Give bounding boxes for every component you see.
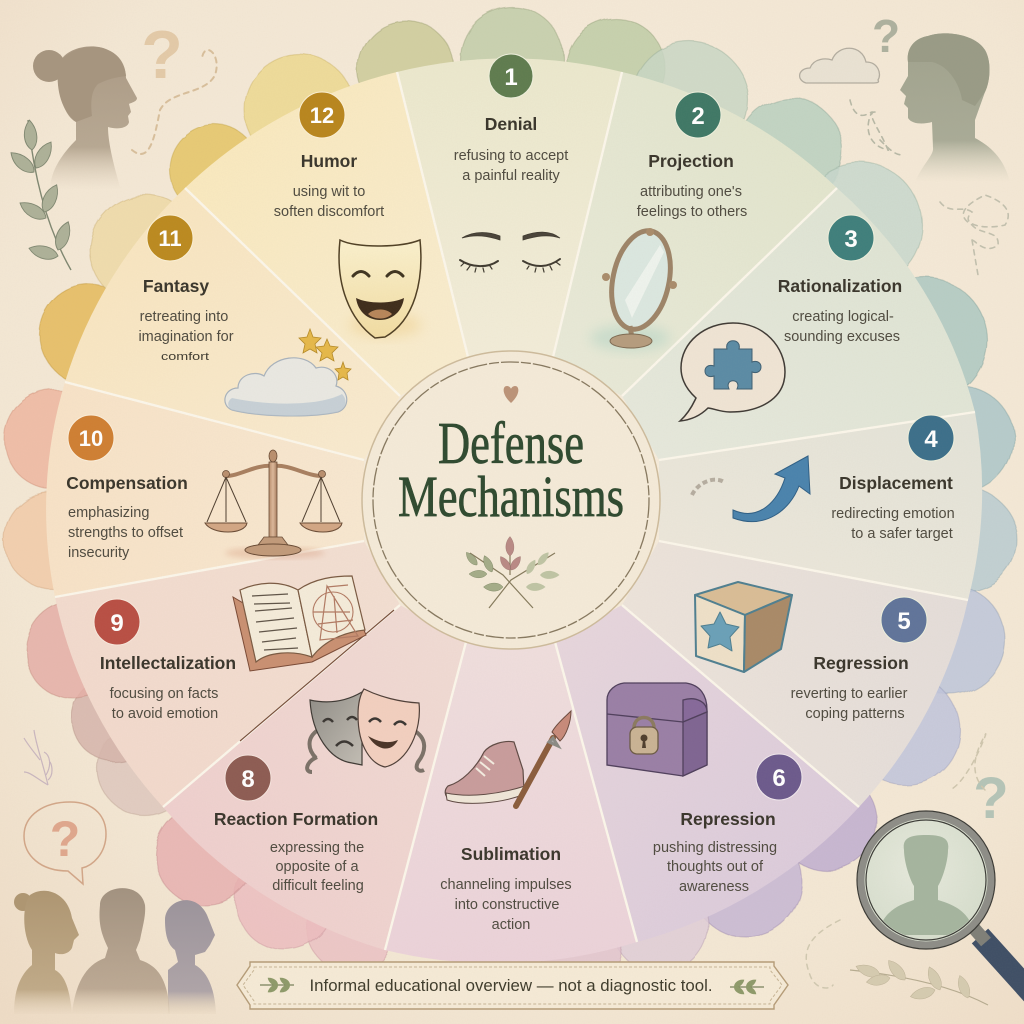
panel: wedge 10 Compensation: strengths to offset <box>68 525 183 541</box>
panel: wedge 12 Humor: using wit to <box>293 184 365 200</box>
icon: speech bubble with puzzle piece <box>680 323 785 421</box>
icon: right laurel <box>730 977 764 996</box>
icon: leaf sprig <box>464 536 560 608</box>
panel: wedge 6 Repression: awareness <box>679 879 749 895</box>
panel: wedge 2 Projection: feelings to others <box>637 204 747 220</box>
panel: wedge 9 Intellectualization: focusing on facts <box>110 686 218 702</box>
icon: faint sprig left <box>24 730 52 785</box>
panel: wedge 1 Denial: refusing to accept <box>454 148 568 164</box>
icon: comedy and tragedy masks <box>307 689 424 772</box>
icon: dreamy cloud with stars <box>225 329 351 416</box>
panel: wedge 2 Projection: 2 <box>691 103 705 130</box>
panel: wedge 10 Compensation: emphasizing <box>68 505 149 521</box>
panel: wedge 4 Displacement <box>692 415 955 542</box>
panel: wedge 6 Repression: Repression <box>680 809 776 829</box>
panel: wedge 5 Regression: coping patterns <box>805 706 905 722</box>
panel: wedge 7 Sublimation: action <box>492 917 530 933</box>
panel: wedge 6 Repression: pushing distressing <box>653 840 777 856</box>
panel: wedge 11 Fantasy: comfort <box>161 351 209 363</box>
panel: wedge 7 Sublimation: channeling impulses <box>440 877 572 893</box>
panel: wedge 8 Reaction Formation: Reaction Formation <box>214 809 378 829</box>
panel: wedge 4 Displacement: Displacement <box>839 473 953 493</box>
panel: wedge 4 Displacement: to a safer target <box>851 526 953 542</box>
panel: wedge 1 Denial: Denial <box>485 114 537 134</box>
panel: wedge 4 Displacement: redirecting emotion <box>831 506 955 522</box>
icon: balance scale <box>205 450 342 559</box>
icon: left laurel <box>260 976 294 995</box>
icon: closed eyes <box>460 232 560 272</box>
panel: wedge 5 Regression <box>695 582 927 722</box>
icon: heart <box>504 386 518 403</box>
title <box>398 410 624 529</box>
footer banner: Informal educational overview — not a diagnostic tool. <box>310 977 712 995</box>
panel: wedge 4 Displacement: 4 <box>924 426 938 453</box>
panel: wedge 8 Reaction Formation <box>214 689 424 894</box>
decorative silhouettes: group bottom left <box>14 888 216 1014</box>
panel: wedge 5 Regression: Regression <box>813 653 909 673</box>
panel: wedge 8 Reaction Formation: opposite of a <box>275 859 359 875</box>
panel: wedge 3 Rationalization: sounding excuses <box>784 329 900 345</box>
panel: wedge 12 Humor: soften discomfort <box>274 204 384 220</box>
icon: cloud top right <box>800 48 880 83</box>
panel: wedge 10 Compensation: 10 <box>79 426 103 451</box>
panel: wedge 8 Reaction Formation: 8 <box>241 766 255 793</box>
icon: question mark bottom right: ? <box>973 766 1009 831</box>
title: Defense <box>438 410 584 476</box>
icon: oval mirror <box>590 225 679 351</box>
decorative silhouette: man top right <box>900 33 1010 182</box>
icon: smiling mask <box>339 240 421 338</box>
panel: wedge 2 Projection: attributing one's <box>640 184 742 200</box>
panel: wedge 3 Rationalization <box>680 215 902 421</box>
panel: wedge 11 Fantasy: Fantasy <box>143 276 209 296</box>
panel: wedge 7 Sublimation: Sublimation <box>461 844 561 864</box>
panel: wedge 10 Compensation: Compensation <box>66 473 188 493</box>
icon: leaf branch bottom right <box>850 957 988 1005</box>
panel: wedge 1 Denial: a painful reality <box>462 168 561 184</box>
icon: question mark top right: ? <box>872 10 900 62</box>
panel: wedge 8 Reaction Formation: difficult feeling <box>272 878 364 894</box>
panel: wedge 11 Fantasy: retreating into <box>140 309 228 325</box>
panel: wedge 11 Fantasy: 11 <box>158 226 182 251</box>
icon: curved blue arrow <box>692 456 810 522</box>
panel: wedge 1 Denial: 1 <box>504 64 518 91</box>
panel: wedge 3 Rationalization: Rationalization <box>778 276 902 296</box>
panel: wedge 10 Compensation: insecurity <box>68 545 130 561</box>
panel: wedge 9 Intellectualization: to avoid emotion <box>112 706 218 722</box>
panel: wedge 11 Fantasy: imagination for <box>138 329 234 345</box>
panel: wedge 9 Intellectualization <box>94 576 366 722</box>
footer banner <box>237 962 788 1009</box>
panel: wedge 9 Intellectualization: Intellectalization <box>100 653 236 673</box>
panel: wedge 12 Humor: 12 <box>310 103 334 128</box>
icon: speech bubble with question mark <box>24 802 106 884</box>
panel: wedge 12 Humor <box>274 92 421 338</box>
panel: wedge 7 Sublimation: into constructive <box>455 897 559 913</box>
title: Mechanisms <box>398 464 624 529</box>
icon: speech bubble with question mark: ? <box>50 811 80 867</box>
icon: leaf branch left <box>7 120 74 270</box>
panel: wedge 6 Repression: thoughts out of <box>667 859 764 875</box>
panel: wedge 10 Compensation <box>66 415 342 561</box>
panel: wedge 11 Fantasy <box>138 215 351 416</box>
icon: sneaker and paintbrush <box>445 711 571 806</box>
panel: wedge 12 Humor: Humor <box>301 151 357 171</box>
panel: wedge 3 Rationalization: 3 <box>844 226 858 253</box>
panel: wedge 2 Projection: Projection <box>648 151 734 171</box>
panel: wedge 8 Reaction Formation: expressing the <box>270 840 364 856</box>
panel: wedge 3 Rationalization: creating logical- <box>792 309 894 325</box>
panel: wedge 6 Repression <box>607 683 802 895</box>
icon: open book with geometry <box>233 576 366 671</box>
decorative dashed trails <box>132 50 1008 988</box>
icon: toy block with star <box>695 582 792 672</box>
panel: wedge 2 Projection <box>590 92 747 351</box>
decorative silhouette: woman top left <box>33 46 137 190</box>
icon: locked chest <box>607 683 707 776</box>
panel: wedge 7 Sublimation <box>440 711 572 933</box>
panel: wedge 5 Regression: reverting to earlier <box>791 686 908 702</box>
panel: wedge 5 Regression: 5 <box>897 608 911 635</box>
panel: wedge 6 Repression: 6 <box>772 765 786 792</box>
icon: magnifying glass with silhouette <box>857 811 1024 996</box>
panel: wedge 9 Intellectualization: 9 <box>110 610 124 637</box>
panel: wedge 1 Denial <box>454 54 568 272</box>
center medallion <box>362 351 660 649</box>
icon: question mark top left: ? <box>141 17 183 93</box>
